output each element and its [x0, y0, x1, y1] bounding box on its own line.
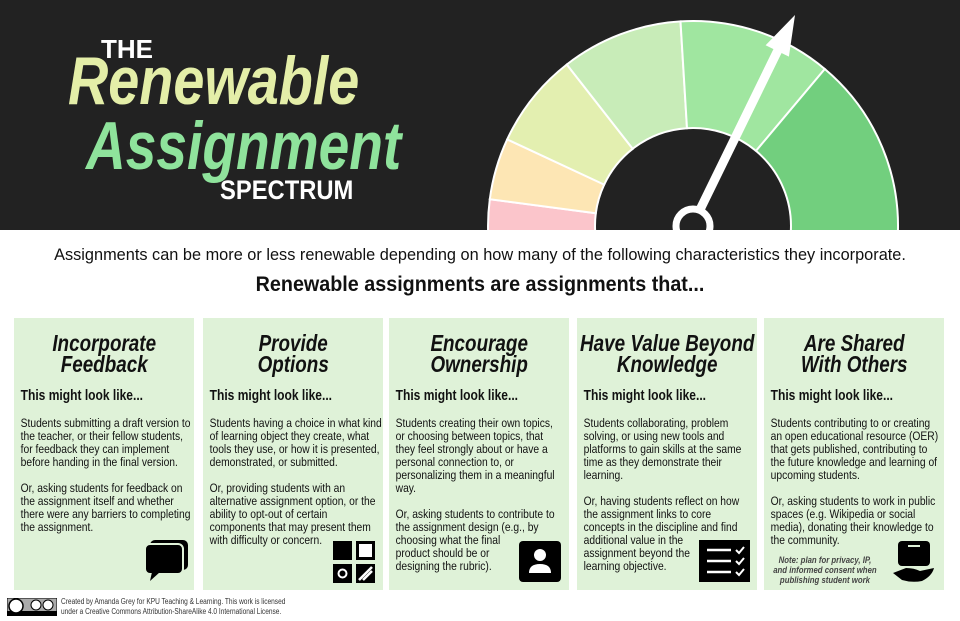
panel: value beyond knowledge: learning objective.	[584, 559, 667, 573]
panel: provide options	[203, 318, 383, 590]
panel: shared with others: media), donating their knowledge to	[771, 520, 934, 534]
panel: shared with others: the community.	[771, 533, 840, 547]
panel: provide options: Provide	[259, 330, 328, 356]
panel: shared with others	[764, 318, 944, 590]
panel: encourage ownership: personal connection to, or	[396, 455, 514, 469]
panel: provide options: Options	[258, 351, 329, 377]
panel: value beyond knowledge: Knowledge	[617, 351, 717, 377]
panel: value beyond knowledge: Have Value Beyond	[580, 330, 754, 356]
icon: hand with device	[893, 541, 934, 582]
footer: license	[7, 597, 285, 616]
panel: encourage ownership: designing the rubric).	[396, 559, 492, 573]
panel: incorporate feedback: Incorporate	[52, 330, 156, 356]
panel: value beyond knowledge: concepts in the discipline and find	[584, 520, 737, 534]
panel: value beyond knowledge: Students collaborating, problem	[584, 416, 728, 430]
icon: options grid	[333, 541, 375, 583]
panel: shared with others: Students contributing to or creating	[771, 416, 930, 430]
panel: value beyond knowledge: learning.	[584, 468, 623, 482]
panel: encourage ownership: Students creating their own topics,	[396, 416, 553, 430]
panel: value beyond knowledge: Or, having students reflect on how	[584, 494, 739, 508]
panel: shared with others: Or, asking students to work in public	[771, 494, 935, 508]
icon: person	[519, 541, 561, 582]
panel: shared with others: spaces (e.g. Wikipedia or social	[771, 507, 915, 521]
panel: provide options: Students having a choice in what kind	[210, 416, 382, 430]
gauge chart	[487, 15, 899, 230]
panel: incorporate feedback: there were any barriers to completing	[21, 507, 190, 521]
panel: provide options: components that may present them	[210, 520, 371, 534]
note	[773, 555, 877, 586]
panel: encourage ownership: This might look like...	[396, 388, 518, 404]
footer: license: under a Creative Commons Attribution-ShareAlike 4.0 International License.	[61, 607, 281, 616]
arrow	[676, 15, 795, 243]
panel: encourage ownership: way.	[396, 481, 416, 495]
panel: shared with others: This might look like...	[771, 388, 893, 404]
subheading: Renewable assignments are assignments that...	[256, 273, 704, 296]
panel: provide options: alternative assignment option, or the	[210, 494, 375, 508]
panel: incorporate feedback	[14, 318, 194, 590]
note: Note: plan for privacy, IP,	[779, 555, 871, 566]
panel: shared with others: an open educational resource (OER)	[771, 429, 938, 443]
panel: shared with others: With Others	[801, 351, 908, 377]
title: Assignment	[86, 108, 401, 184]
icon: speech bubbles	[146, 540, 188, 581]
panel: provide options: tools they use, or how it is presented,	[210, 442, 379, 456]
panel: value beyond knowledge	[577, 318, 757, 590]
panel: incorporate feedback: This might look like...	[21, 388, 143, 404]
note: and informed consent when	[773, 565, 877, 576]
panel: incorporate feedback: for feedback they can implement	[21, 442, 169, 456]
panel: shared with others: upcoming students.	[771, 468, 860, 482]
title: Renewable	[68, 43, 359, 119]
panel: encourage ownership: Or, asking students to contribute to	[396, 507, 555, 521]
title	[68, 34, 404, 205]
panel: encourage ownership	[389, 318, 569, 590]
panel: value beyond knowledge: This might look like...	[584, 388, 706, 404]
panel: incorporate feedback: the assignment itself and whether	[21, 494, 174, 508]
panel: provide options: Or, providing students with an	[210, 481, 345, 495]
panel: shared with others: Are Shared	[804, 330, 905, 356]
panel: value beyond knowledge: the assignment links to core	[584, 507, 711, 521]
panel: provide options: This might look like...	[210, 388, 332, 404]
panel: encourage ownership: choosing what the final	[396, 533, 500, 547]
panel: value beyond knowledge: assignment beyond the	[584, 546, 690, 560]
panel: encourage ownership: Ownership	[430, 351, 528, 377]
panel: shared with others: that gets published, contributing to	[771, 442, 927, 456]
icon: cc badge	[7, 598, 57, 616]
panel: incorporate feedback: the teacher, or their fellow students,	[21, 429, 183, 443]
panel: provide options: with difficulty or concern.	[210, 533, 322, 547]
note: publishing student work	[780, 575, 870, 586]
panel: incorporate feedback: before handing in the final version.	[21, 455, 178, 469]
panel: value beyond knowledge: solving, or using new tools and	[584, 429, 724, 443]
panel: incorporate feedback: Or, asking students for feedback on	[21, 481, 182, 495]
panel: encourage ownership: or choosing between topics, that	[396, 429, 543, 443]
panel: incorporate feedback: Students submitting a draft version to	[21, 416, 190, 430]
panel: encourage ownership: product should be or	[396, 546, 489, 560]
footer: license: Created by Amanda Grey for KPU Teaching & Learning. This work is licensed	[61, 597, 285, 606]
header band	[0, 0, 960, 230]
title: SPECTRUM	[220, 175, 353, 205]
panel: provide options: demonstrated, or submitted.	[210, 455, 338, 469]
title: THE	[101, 34, 153, 64]
intro text: Assignments can be more or less renewable depending on how many of the following characteristics they incorporate.	[54, 245, 906, 264]
panel: encourage ownership: Encourage	[430, 330, 528, 356]
panel: provide options: ability to opt-out of certain	[210, 507, 327, 521]
panel: provide options: of learning object they create, what	[210, 429, 369, 443]
panel: incorporate feedback: the assignment.	[21, 520, 93, 534]
panel: encourage ownership: the assignment design (e.g., by	[396, 520, 539, 534]
panel: value beyond knowledge: additional value in the	[584, 533, 683, 547]
panel: encourage ownership: they feel strongly about or have a	[396, 442, 548, 456]
panel: encourage ownership: personalizing them in a meaningful	[396, 468, 555, 482]
panel: incorporate feedback: Feedback	[61, 351, 148, 377]
panel: value beyond knowledge: platforms to gain skills at the same	[584, 442, 741, 456]
panel: value beyond knowledge: time as they demonstrate their	[584, 455, 722, 469]
icon: checklist	[699, 540, 750, 582]
panel: shared with others: the future knowledge and learning of	[771, 455, 937, 469]
